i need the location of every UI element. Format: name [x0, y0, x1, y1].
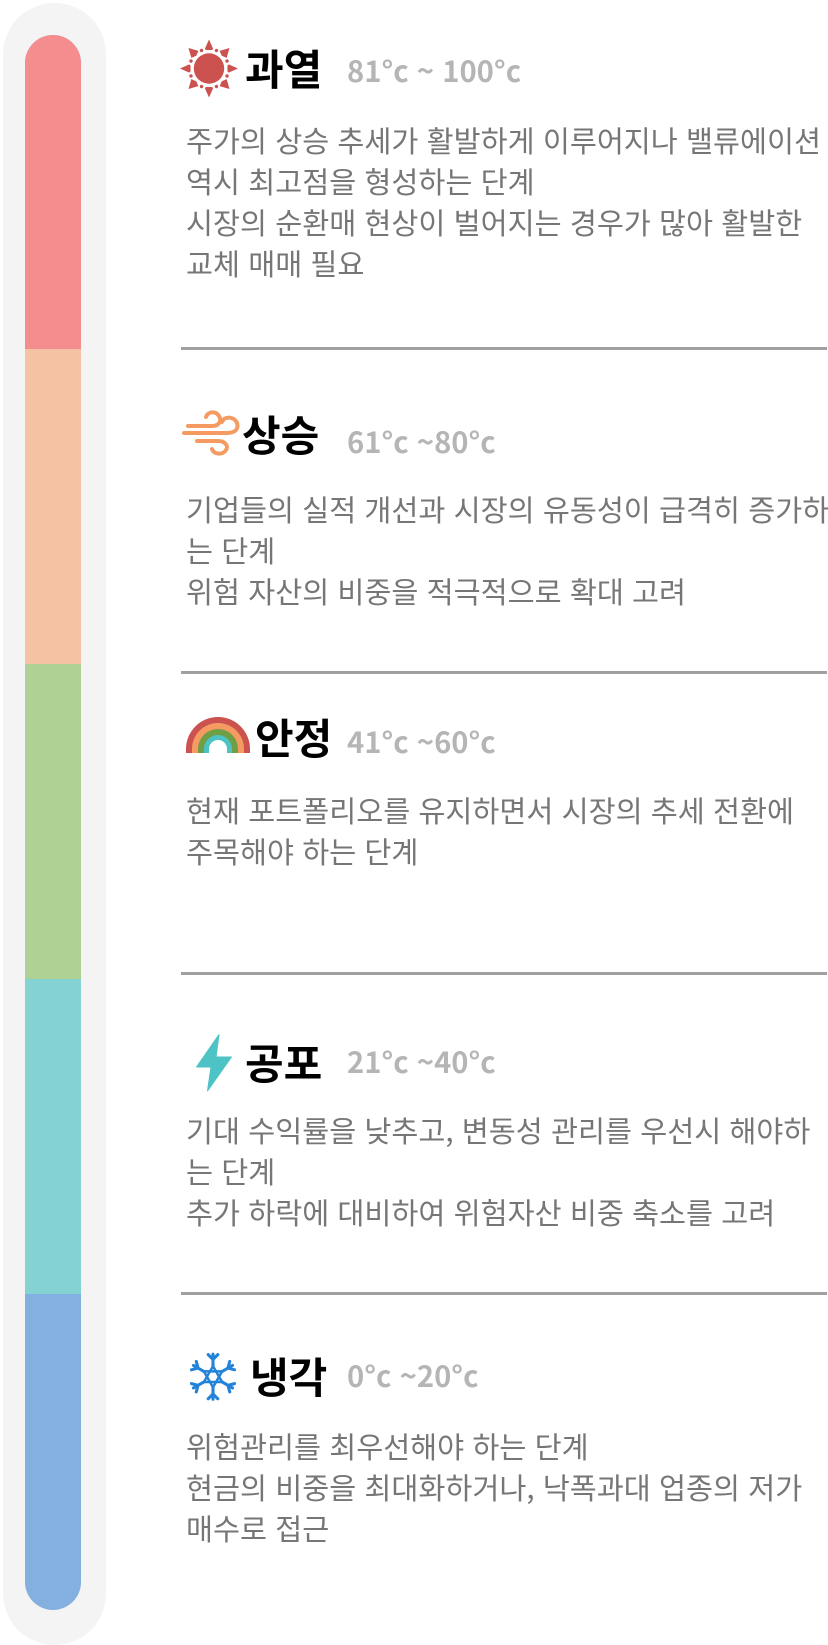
description: 역시 최고점을 형성하는 단계: [186, 160, 535, 202]
thermometer casing: [3, 3, 106, 1645]
icon: snowflake: [190, 1352, 236, 1401]
description: 추가 하락에 대비하여 위험자산 비중 축소를 고려: [186, 1191, 775, 1233]
description: 위험 자산의 비중을 적극적으로 확대 고려: [186, 570, 686, 612]
description: 기대 수익률을 낮추고, 변동성 관리를 우선시 해야하: [186, 1109, 810, 1151]
thermometer colour scale: [25, 35, 81, 1610]
temperature range: 21°c ~40°c: [347, 1040, 496, 1082]
panel: rising: [182, 403, 828, 612]
description: 매수로 접근: [186, 1507, 329, 1549]
temperature range: 41°c ~60°c: [347, 720, 496, 762]
thermometer: [3, 3, 106, 1645]
description: 교체 매매 필요: [186, 242, 364, 284]
description: 위험관리를 최우선해야 하는 단계: [186, 1425, 589, 1467]
description: 기업들의 실적 개선과 시장의 유동성이 급격히 증가하: [186, 488, 828, 530]
panel: overheat: [180, 37, 821, 284]
heading: 공포: [245, 1031, 322, 1092]
description: [186, 1425, 802, 1549]
description: 주가의 상승 추세가 활발하게 이루어지나 밸류에이션: [186, 119, 821, 161]
description: 주목해야 하는 단계: [186, 830, 418, 872]
panel: cooling: [186, 1345, 802, 1549]
description: [186, 1109, 810, 1233]
temperature range: 61°c ~80°c: [347, 420, 496, 462]
icon: rainbow: [186, 717, 250, 753]
temperature range: 0°c ~20°c: [347, 1354, 478, 1396]
divider: [181, 671, 827, 674]
heading: 과열: [245, 37, 322, 98]
description: 현재 포트폴리오를 유지하면서 시장의 추세 전환에: [186, 789, 794, 831]
temperature range: 81°c ~ 100°c: [347, 49, 521, 91]
description: [186, 789, 794, 872]
icon: lightning bolt: [196, 1034, 232, 1092]
description: 현금의 비중을 최대화하거나, 낙폭과대 업종의 저가: [186, 1466, 802, 1508]
icon: sun: [180, 40, 238, 98]
divider: [181, 347, 827, 350]
heading: 상승: [242, 403, 319, 464]
icon: wind: [182, 410, 240, 456]
divider: [181, 972, 827, 975]
description: 시장의 순환매 현상이 벌어지는 경우가 많아 활발한: [186, 201, 802, 243]
panel: fear: [186, 1031, 810, 1233]
description: [186, 488, 828, 612]
description: 는 단계: [186, 1150, 275, 1192]
divider: [181, 1292, 827, 1295]
panel: stable: [186, 706, 794, 872]
description: [186, 119, 821, 284]
heading: 냉각: [250, 1345, 327, 1406]
description: 는 단계: [186, 529, 275, 571]
heading: 안정: [255, 706, 332, 767]
